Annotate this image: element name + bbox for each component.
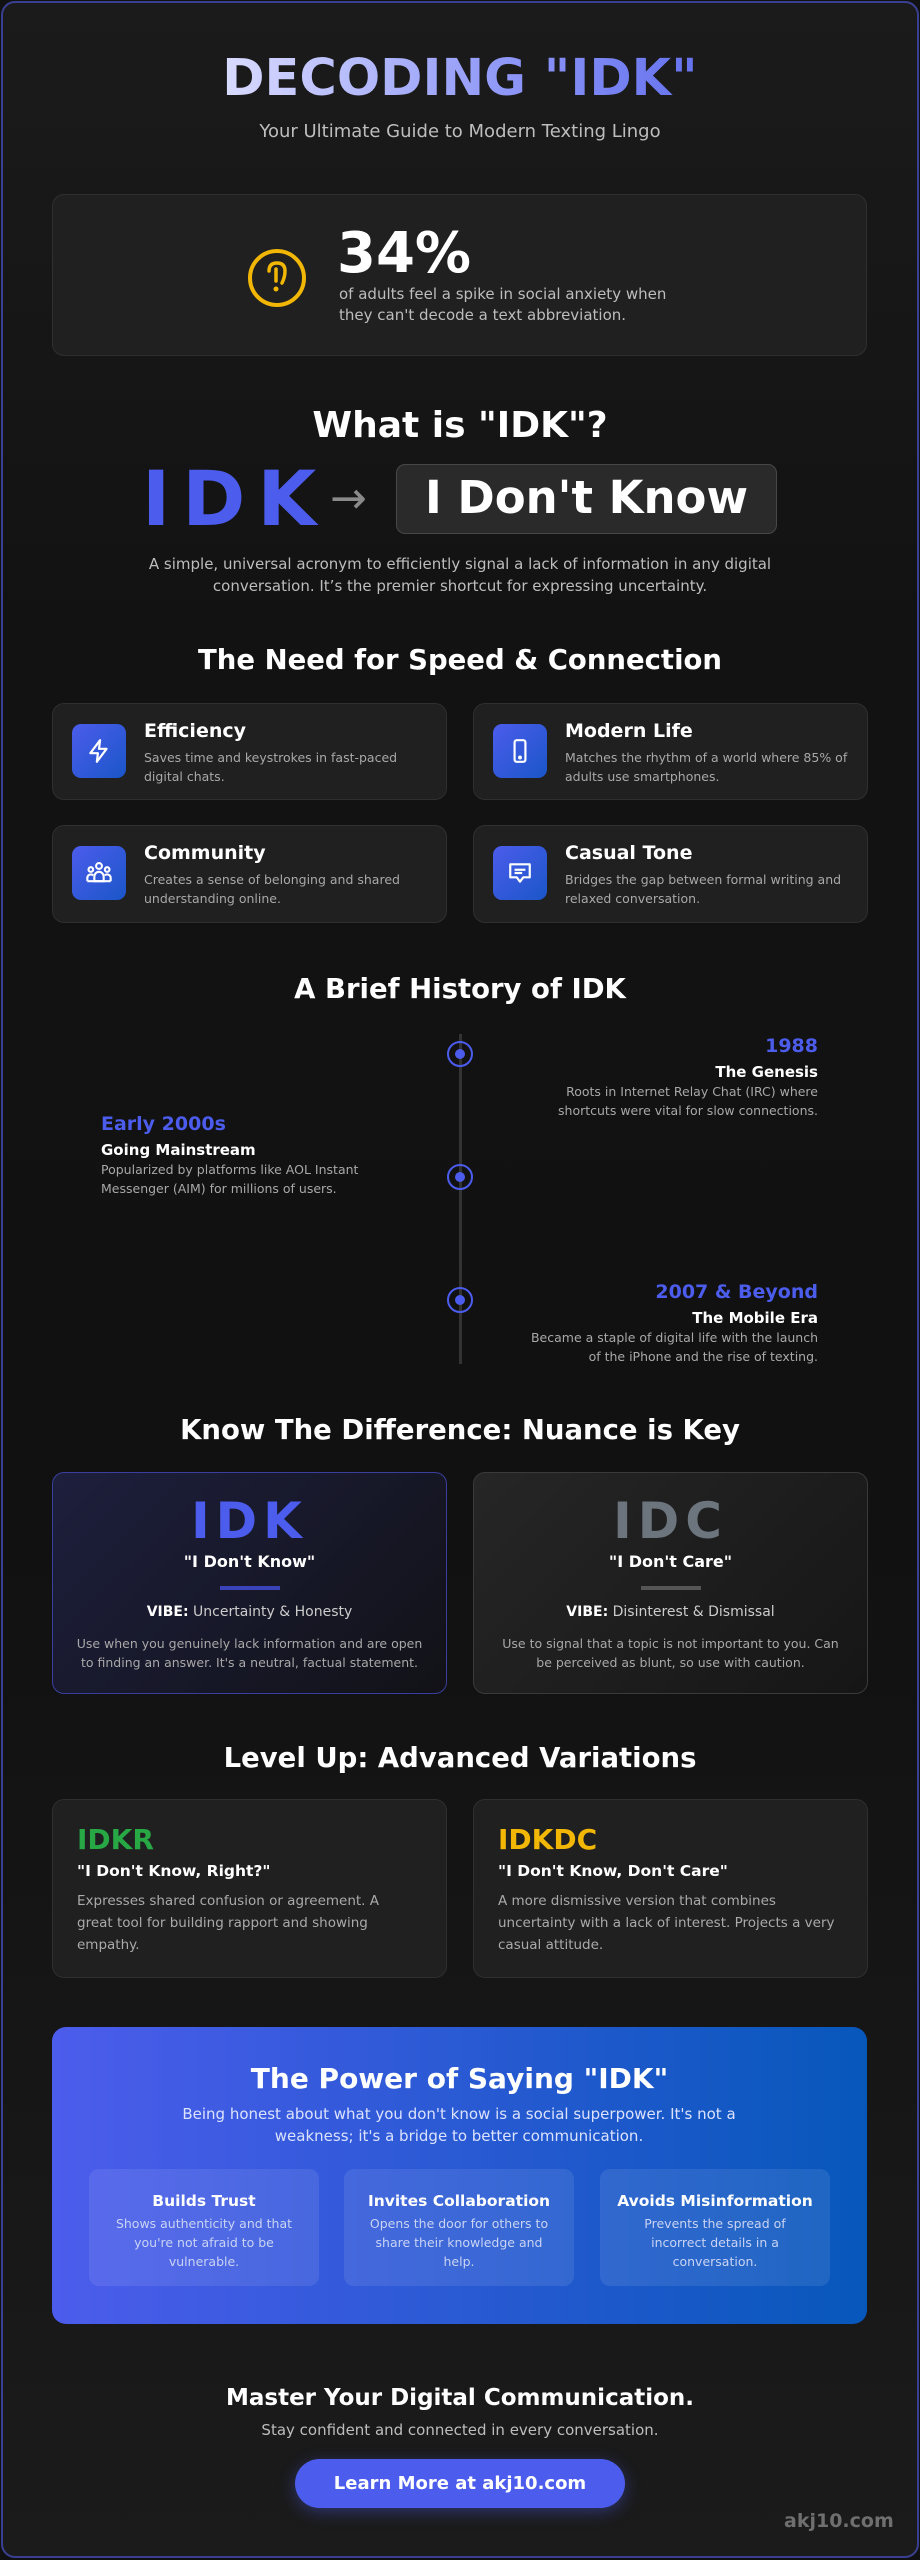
panel: IDK comparison: VIBE: Uncertainty & Honesty bbox=[147, 1604, 352, 1620]
timeline bbox=[447, 1034, 473, 1364]
timeline item: 1988: The Genesis bbox=[715, 1063, 818, 1081]
timeline item: 1988 bbox=[558, 1035, 818, 1118]
panel: casual tone: Casual Tone bbox=[565, 842, 692, 864]
benefit: builds trust: Shows authenticity and that you're not afraid to be vulnerable. bbox=[116, 2216, 292, 2269]
timeline item: early 2000s: Popularized by platforms like AOL Instant Messenger (AIM) for millions of users. bbox=[101, 1162, 358, 1196]
panel: IDKDC: A more dismissive version that combines uncertainty with a lack of interest. Projects a very casual attitude. bbox=[498, 1893, 834, 1953]
timeline item: 1988: 1988 bbox=[765, 1035, 818, 1057]
acronym IDK: IDK bbox=[142, 454, 328, 543]
benefit: invites collaboration bbox=[344, 2169, 574, 2286]
benefit: invites collaboration: Invites Collaboration bbox=[368, 2192, 550, 2210]
button: Learn More at akj10.com bbox=[334, 2473, 586, 2494]
panel: power of saying IDK bbox=[52, 2027, 867, 2324]
benefit: builds trust: Builds Trust bbox=[152, 2192, 256, 2210]
heading: need for speed: The Need for Speed & Connection bbox=[198, 644, 722, 676]
panel: stat card bbox=[52, 194, 867, 356]
stat number: 34% bbox=[337, 221, 471, 286]
description: A simple, universal acronym to efficiently signal a lack of information in any digital conversation. It’s the premier shortcut for expressing uncertainty. bbox=[149, 555, 771, 595]
panel: IDKDC bbox=[473, 1799, 868, 1978]
panel: IDKR: Expresses shared confusion or agreement. A great tool for building rapport and showing empathy. bbox=[77, 1893, 379, 1953]
closing heading: Master Your Digital Communication. bbox=[226, 2385, 694, 2411]
panel: IDC comparison: IDC bbox=[613, 1492, 728, 1550]
panel: IDKDC: "I Don't Know, Don't Care" bbox=[498, 1862, 728, 1880]
panel: community: Community bbox=[144, 842, 266, 864]
panel: efficiency: Saves time and keystrokes in fast-paced digital chats. bbox=[144, 750, 397, 784]
stat description: of adults feel a spike in social anxiety when they can't decode a text abbreviation. bbox=[339, 285, 666, 324]
benefit: avoids misinformation bbox=[600, 2169, 830, 2286]
icon: chat bbox=[493, 846, 547, 900]
benefit: avoids misinformation: Prevents the spread of incorrect details in a conversation. bbox=[644, 2216, 786, 2269]
panel: community: Creates a sense of belonging and shared understanding online. bbox=[144, 872, 400, 906]
panel: power of saying IDK: Being honest about what you don't know is a social superpower. It's not a weakness; it's a bridge to better communication. bbox=[182, 2105, 736, 2145]
subtitle: Your Ultimate Guide to Modern Texting Lingo bbox=[259, 121, 661, 142]
arrow: → bbox=[330, 473, 367, 524]
panel: IDC comparison: VIBE: Disinterest & Dismissal bbox=[566, 1604, 775, 1620]
panel: modern life bbox=[473, 703, 868, 800]
panel: IDKR bbox=[52, 1799, 447, 1978]
panel: modern life: Modern Life bbox=[565, 720, 693, 742]
panel: IDC comparison: "I Don't Care" bbox=[609, 1552, 732, 1571]
timeline item: 2007: Became a staple of digital life with the launch of the iPhone and the rise of texting. bbox=[531, 1330, 818, 1364]
icon: people bbox=[72, 846, 126, 900]
meaning box bbox=[396, 464, 777, 534]
timeline item: 1988: Roots in Internet Relay Chat (IRC) where shortcuts were vital for slow connections. bbox=[558, 1084, 818, 1118]
benefit: builds trust bbox=[89, 2169, 319, 2286]
heading: history: A Brief History of IDK bbox=[294, 973, 626, 1005]
timeline item: 2007 bbox=[531, 1281, 818, 1364]
timeline item: early 2000s: Going Mainstream bbox=[101, 1141, 256, 1159]
panel: IDK comparison: IDK bbox=[191, 1492, 308, 1550]
timeline item: early 2000s bbox=[101, 1113, 358, 1196]
title: DECODING "IDK" bbox=[222, 49, 698, 108]
timeline item: 2007: The Mobile Era bbox=[692, 1309, 818, 1327]
benefit: avoids misinformation: Avoids Misinformation bbox=[617, 2192, 813, 2210]
panel: efficiency bbox=[52, 703, 447, 800]
icon: phone bbox=[493, 724, 547, 778]
timeline item: early 2000s: Early 2000s bbox=[101, 1113, 226, 1135]
panel: IDK comparison bbox=[52, 1472, 447, 1694]
panel: IDKR: "I Don't Know, Right?" bbox=[77, 1862, 271, 1880]
heading: level up: Level Up: Advanced Variations bbox=[224, 1742, 696, 1774]
panel: efficiency: Efficiency bbox=[144, 720, 246, 742]
panel: IDKDC: IDKDC bbox=[498, 1823, 597, 1856]
panel: IDC comparison bbox=[473, 1472, 868, 1694]
heading: know the difference: Know The Difference: Nuance is Key bbox=[180, 1414, 740, 1446]
watermark: akj10.com bbox=[784, 2510, 894, 2532]
heading: what is idk: What is "IDK"? bbox=[312, 405, 608, 446]
panel: modern life: Matches the rhythm of a world where 85% of adults use smartphones. bbox=[565, 750, 847, 784]
meaning box: I Don't Know bbox=[425, 471, 748, 524]
panel: IDK comparison: "I Don't Know" bbox=[184, 1552, 315, 1571]
icon: lightning bbox=[72, 724, 126, 778]
panel: IDC comparison: Use to signal that a topic is not important to you. Can be perceived as blunt, so use with caution. bbox=[502, 1636, 839, 1670]
panel: IDKR: IDKR bbox=[77, 1823, 154, 1856]
timeline item: 2007: 2007 & Beyond bbox=[655, 1281, 818, 1303]
panel: community bbox=[52, 825, 447, 923]
panel: power of saying IDK: The Power of Saying "IDK" bbox=[251, 2062, 668, 2095]
button bbox=[295, 2459, 625, 2508]
closing subtitle: Stay confident and connected in every conversation. bbox=[261, 2421, 659, 2439]
panel: casual tone: Bridges the gap between formal writing and relaxed conversation. bbox=[565, 872, 841, 906]
benefit: invites collaboration: Opens the door for others to share their knowledge and help. bbox=[370, 2216, 548, 2269]
icon: alert circle bbox=[248, 249, 306, 307]
panel: IDK comparison: Use when you genuinely lack information and are open to finding an answer. It's a neutral, factual statement. bbox=[77, 1636, 422, 1670]
panel: casual tone bbox=[473, 825, 868, 923]
